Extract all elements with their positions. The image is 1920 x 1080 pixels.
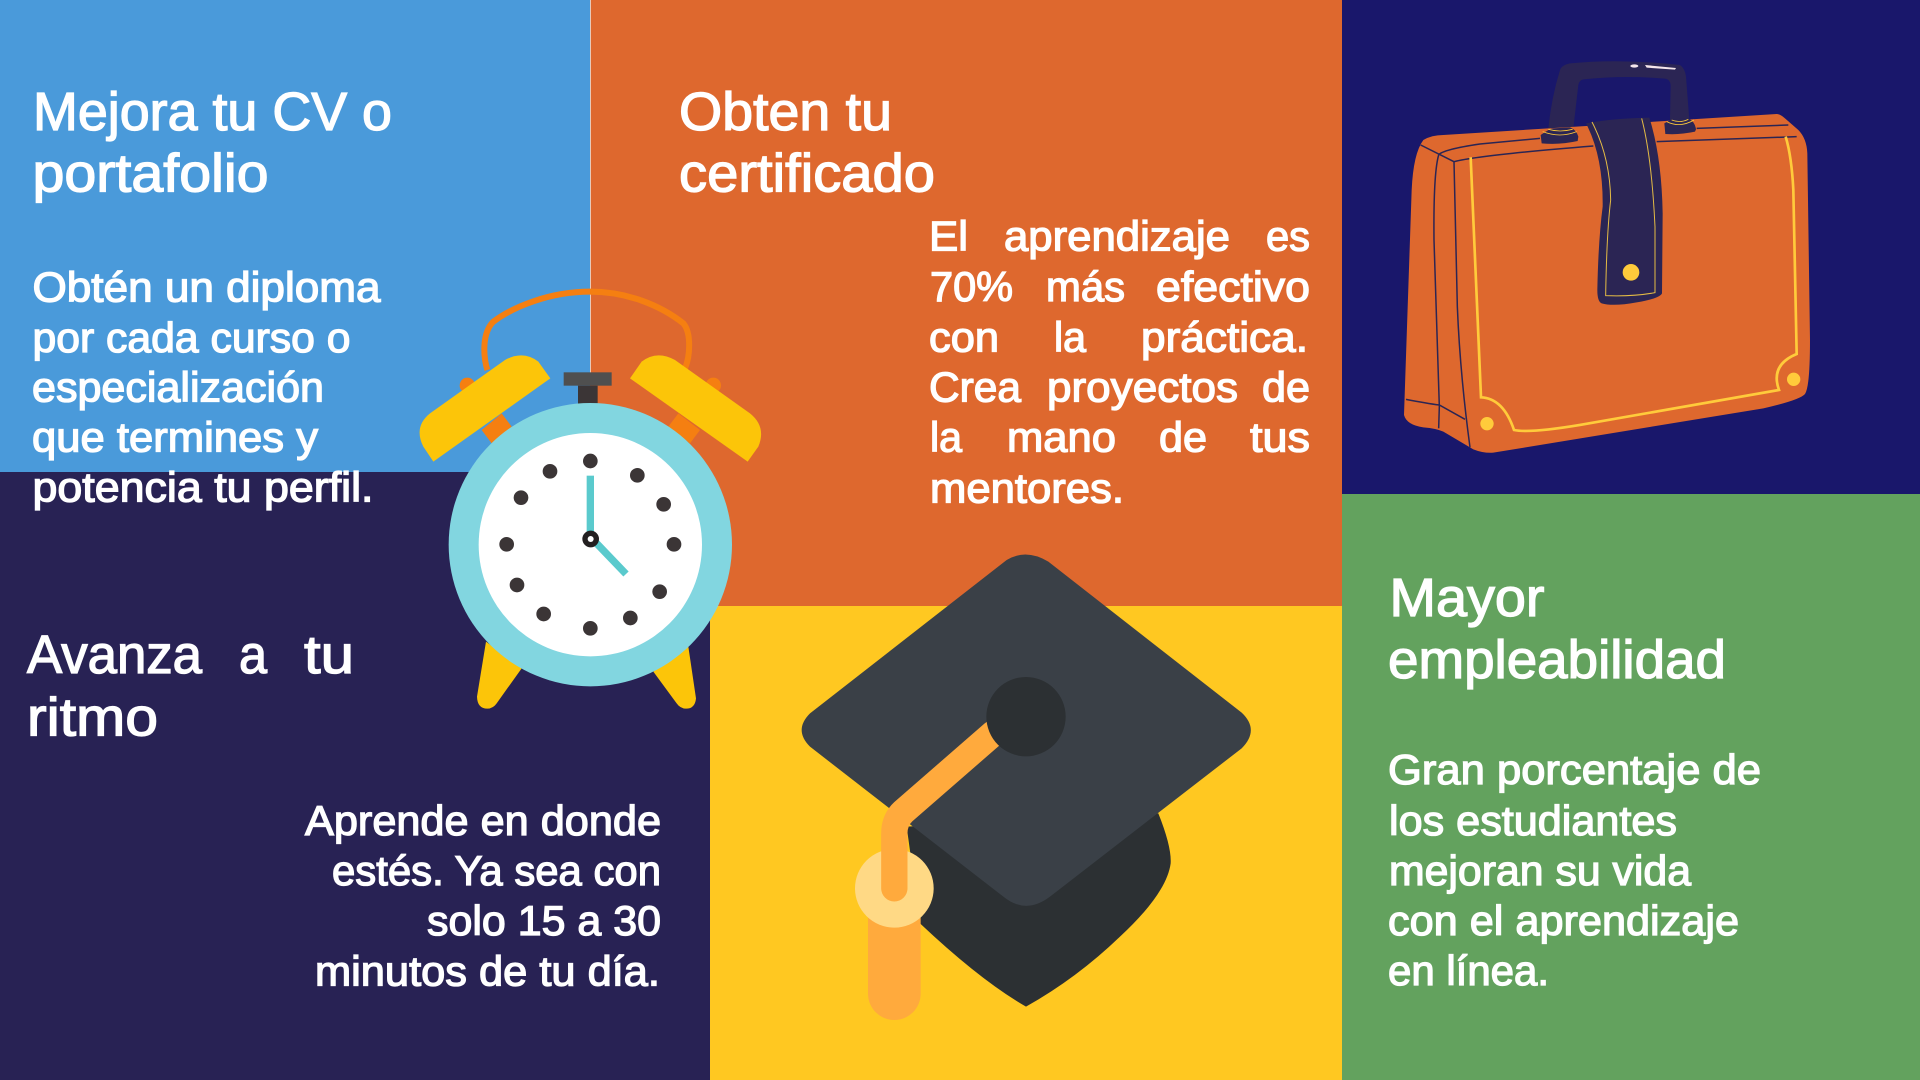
body: diploma: que termines y: [32, 414, 318, 461]
panel: yellow graduation cap background: [710, 606, 1342, 1080]
panel: navy pace background: [0, 472, 710, 1080]
heading: Avanza a tu ritmo: ritmo: [27, 689, 158, 748]
body: employment: Gran porcentaje de: [1388, 746, 1761, 793]
text block: Obten tu certificado: [679, 83, 1310, 512]
body: right aligned: Aprende en donde: [305, 797, 661, 844]
body: employment: con el aprendizaje: [1388, 897, 1739, 944]
body: diploma: por cada curso o: [32, 314, 350, 361]
panel: dark blue briefcase background: [1342, 0, 1920, 495]
heading: Avanza a tu ritmo: Avanza: [27, 626, 202, 685]
body: justified practice text: es: [1266, 213, 1310, 260]
body: justified practice text: aprendizaje: [1004, 213, 1230, 260]
panel: green employability background: [1342, 494, 1920, 1080]
body: justified practice text: más: [1046, 263, 1125, 310]
body: justified practice text: tus: [1250, 414, 1310, 461]
heading: Mayor empleabilidad: empleabilidad: [1388, 631, 1726, 690]
body: employment: mejoran su vida: [1389, 847, 1692, 894]
icon: briefcase: [1404, 61, 1810, 453]
body: diploma: potencia tu perfil.: [32, 464, 374, 511]
body: employment: los estudiantes: [1389, 797, 1677, 844]
heading: Mayor empleabilidad: Mayor: [1390, 569, 1544, 628]
body: justified practice text: [929, 213, 1310, 511]
body: diploma: [32, 264, 381, 511]
heading: Obten tu certificado: Obten tu: [679, 83, 892, 142]
heading: Avanza a tu ritmo: tu: [304, 626, 354, 685]
heading: Mejora tu CV o portafolio: Mejora tu CV o: [33, 83, 392, 142]
icon: graduation cap: [802, 555, 1251, 1020]
body: right aligned: estés. Ya sea con: [332, 847, 661, 894]
heading: Avanza a tu ritmo: [27, 626, 354, 748]
body: justified practice text: práctica.: [1141, 314, 1308, 361]
text block: Mejora tu CV: [32, 83, 392, 511]
body: justified practice text: con: [929, 314, 999, 361]
text block: Mayor empleabilidad: [1388, 569, 1761, 994]
panel: blue CV background: [0, 0, 590, 472]
body: justified practice text: proyectos: [1047, 364, 1238, 411]
heading: Mejora tu CV o portafolio: [32, 83, 392, 204]
body: justified practice text: 70%: [930, 263, 1013, 310]
panel: orange certificate background: [590, 0, 1342, 606]
body: justified practice text: de: [1262, 364, 1310, 411]
heading: Mayor empleabilidad: [1388, 569, 1726, 690]
heading: Mejora tu CV o portafolio: portafolio: [32, 145, 268, 204]
body: right aligned: minutos de tu día.: [315, 948, 660, 995]
body: justified practice text: Crea: [929, 364, 1022, 411]
body: justified practice text: de: [1159, 414, 1207, 461]
body: right aligned: solo 15 a 30: [427, 897, 661, 944]
body: diploma: Obtén un diploma: [32, 264, 381, 311]
body: justified practice text: mano: [1007, 414, 1116, 461]
heading: Obten tu certificado: [679, 83, 935, 204]
heading: Avanza a tu ritmo: a: [239, 626, 267, 685]
body: justified practice text: la: [1054, 314, 1087, 361]
text block: Avanza a tu ritmo: [27, 626, 661, 995]
heading: Obten tu certificado: certificado: [679, 145, 935, 204]
body: justified practice text: mentores.: [930, 464, 1124, 512]
icon: alarm clock: [420, 292, 761, 709]
body: justified practice text: la: [930, 414, 963, 461]
body: justified practice text: El: [929, 213, 968, 260]
body: employment: en línea.: [1388, 947, 1549, 994]
body: right aligned: [305, 797, 661, 995]
body: employment: [1388, 746, 1761, 994]
body: diploma: especialización: [32, 364, 324, 411]
body: justified practice text: efectivo: [1156, 263, 1310, 310]
